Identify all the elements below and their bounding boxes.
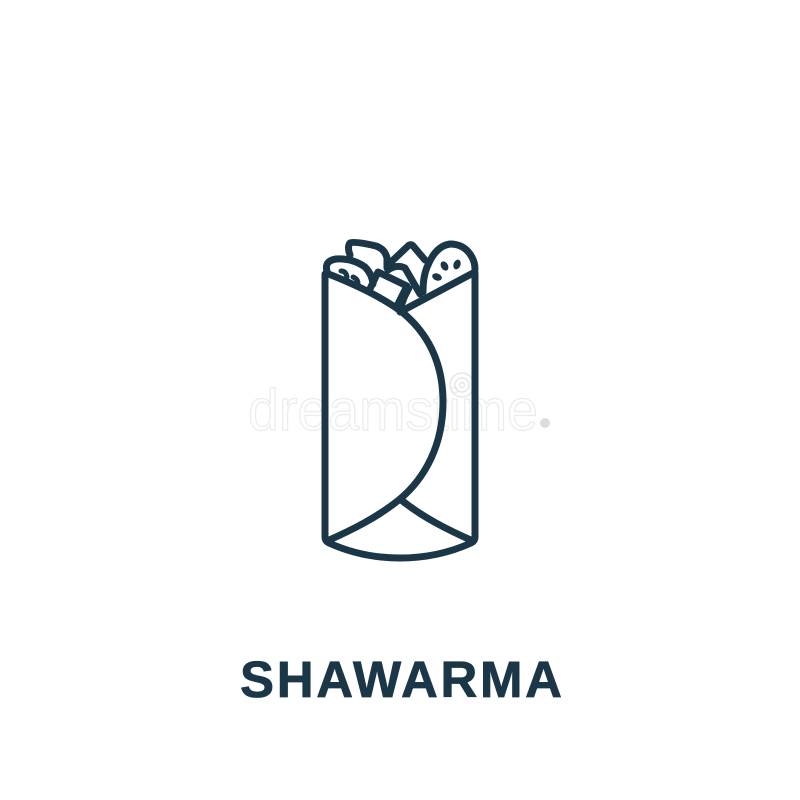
wrap body outline	[325, 274, 475, 558]
middle diamond piece	[390, 245, 425, 263]
watermark: dreamstime: dreamstime	[248, 378, 538, 443]
front flap curve	[326, 273, 443, 541]
icon: shawarma wrap	[325, 242, 475, 558]
right pickle piece	[423, 244, 475, 292]
pickle seeds	[431, 259, 462, 282]
right fold	[400, 272, 475, 312]
bottom fold	[400, 499, 473, 541]
title: SHAWARMA	[240, 651, 562, 708]
square meat piece	[369, 272, 407, 306]
inner meat pieces	[388, 266, 420, 294]
top meat piece	[348, 242, 387, 268]
lettuce piece	[326, 259, 373, 284]
lettuce marks	[341, 271, 358, 284]
